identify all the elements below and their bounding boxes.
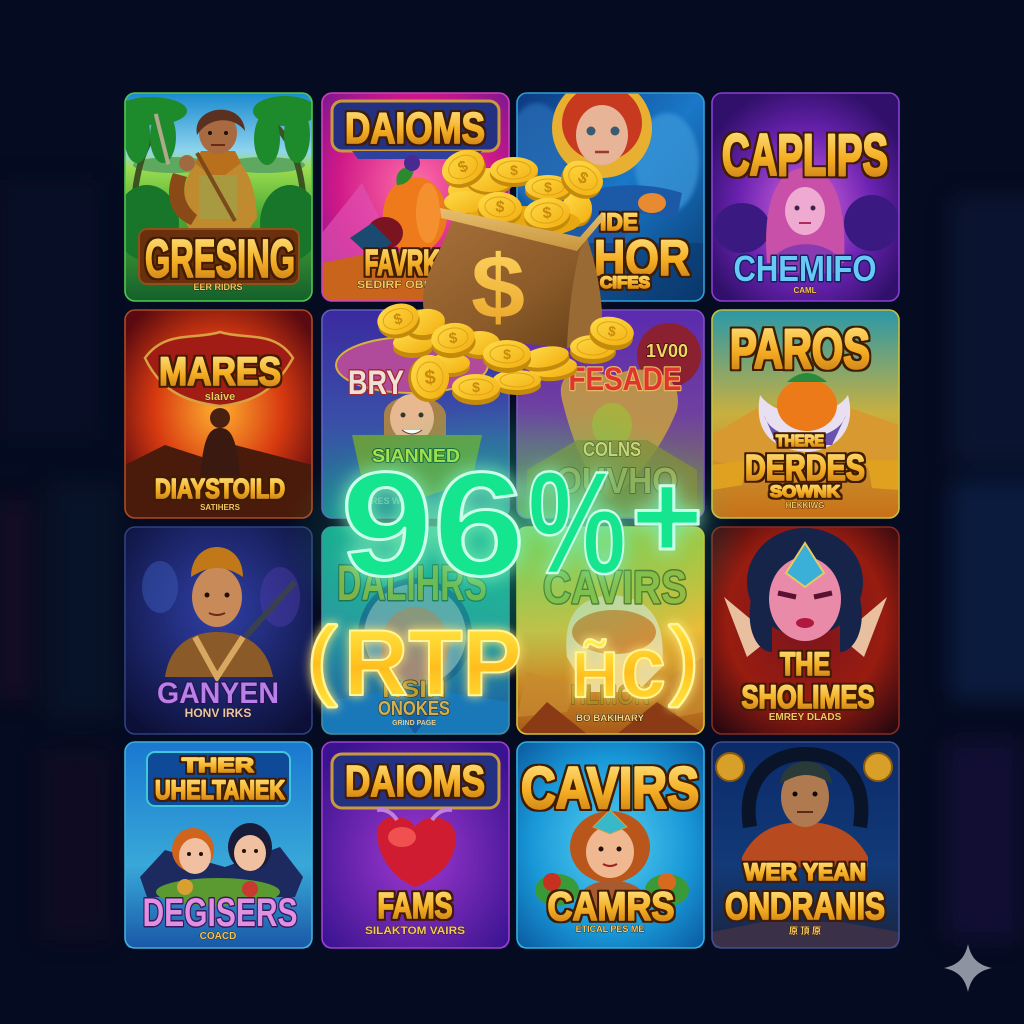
game name: ONOKES [378,698,450,720]
scene [517,527,704,734]
title: FESADE [568,361,682,397]
scene [115,93,320,301]
scene [125,742,312,948]
subheadline: (RTP Hc): RTP [344,610,522,715]
back coins: $ [544,179,552,195]
subtitle: ETICAL PES ME [576,924,644,934]
subtitle: CAML [793,286,817,295]
heading word: THE [780,646,830,682]
card 11: Cavirs yellow [517,527,704,734]
card 4: Caplips [712,93,900,301]
title: PAROS [730,317,870,380]
game word: HSIH [382,676,446,703]
subtitle: SATIHERS [200,503,241,512]
game name: FAVRK [364,242,440,283]
subtitle: SEDIRF OBI [357,279,427,291]
front coins: $ [607,322,617,340]
headline: 96%+ [341,442,703,607]
number badge: 1V00 [646,341,688,361]
card 16 border [712,742,899,948]
card 9 border [125,527,312,734]
icon: money bag with coins [374,143,636,405]
game name: OUVHO [556,460,678,501]
scene [322,527,509,734]
scene [712,527,899,734]
card 4 border [712,93,899,301]
card 3: Thor [518,94,704,300]
subtitle: GRIND PAGE [392,720,436,727]
card 9: Ganyen [125,527,312,734]
title: BRY [348,364,404,402]
title: UHELTANEK [155,775,285,805]
bag rim [440,208,603,251]
title: SHOLIMES [742,679,874,715]
front coins: $ [472,379,480,395]
game name: DIAYSTOILD [155,473,285,504]
back coins: $ [575,169,591,188]
title: MARES [159,350,281,394]
game name: FAMS [378,885,452,926]
heading word: THERE [776,433,824,450]
game name: SIANNED [372,446,460,466]
scene [125,310,312,518]
front coins: $ [424,366,437,389]
subheadline: (RTP Hc): ) [670,611,698,707]
scene [712,742,899,948]
card 13 border [125,742,312,948]
card 6 border [322,310,509,518]
subtitle: SILAKTOM VAIRS [365,925,465,937]
game name: DEGISERS [142,891,298,935]
title: ONDRANIS [725,886,885,928]
scene [518,94,704,300]
card 1 border [125,93,312,301]
icon: sparkle watermark [944,944,992,992]
game word: SOWNK [770,482,841,501]
card 10: Dalihrs [322,527,509,734]
subtitle: HEKKIWG [786,501,824,510]
headline: 96%+: 6 [433,442,525,607]
card 12 border [712,527,899,734]
card 7: Fesade [517,310,704,518]
title: DALIHRS [337,555,487,611]
card 1: Gresing [115,93,320,301]
game word: HLMON [570,679,650,710]
card 8 border [712,310,899,518]
title: DAIOMS [345,104,485,153]
heading word: THER [182,755,255,777]
headline: 96%+: % [528,442,626,605]
back coins [436,143,609,238]
subtitle: EMREY DLADS [769,712,842,723]
back coins: $ [495,199,505,216]
game word: COLNS [583,439,641,461]
card 15 border [517,742,704,948]
scene [712,310,899,518]
front coins: $ [392,310,405,329]
scene [125,527,312,734]
scene [712,93,900,301]
title: CAVIRS [521,756,699,821]
card 15: Cavirs cyan [517,742,704,948]
game name: CHEMIFO [734,248,876,289]
subtitle: EER RIDRS [193,282,243,292]
card 3 border [517,93,704,301]
subtitle: GIRRES WW [355,496,410,506]
card 5: Mares [125,310,312,518]
card 2 border [322,93,509,301]
heading word: IDE [600,209,638,236]
subtitle: CIFES [600,273,650,292]
card 7 border [517,310,704,518]
card 2: Daioms fruit [322,93,509,301]
front coins: $ [503,346,511,362]
title: HOR [594,230,690,286]
back coins: $ [510,162,518,178]
front coins: $ [448,329,459,347]
dollar sign: $ [471,236,525,337]
subheadline: (RTP Hc): H̃ [572,638,618,711]
back coins: $ [456,158,471,177]
game name: CAMRS [548,885,674,929]
card 14: Daioms heart [322,742,509,948]
subheadline: (RTP Hc): c [620,617,666,716]
title: GANYEN [157,677,279,710]
scene [322,310,509,518]
heading word: WER YEAN [744,859,866,886]
card 8: Paros [712,310,899,518]
green glow behind headline [285,400,745,680]
back coins: $ [542,205,552,222]
card 6: Bry [322,310,509,518]
card 10 border [322,527,509,734]
subheadline: (RTP Hc): ( [308,611,337,707]
title: GRESING [145,229,295,289]
scene [322,742,509,948]
card 11 border [517,527,704,734]
card 14 border [322,742,509,948]
bag side fold [567,238,602,348]
subheadline: (RTP Hc) [308,610,698,716]
card 16: Ondranis [712,742,899,948]
scene [322,93,509,301]
subtitle: BO BAKIHARY [576,713,644,723]
headline: 96%+: 9 [341,442,433,607]
title: CAVIRS [543,561,687,613]
headline: 96%+: + [631,448,703,586]
front coins [374,299,636,405]
card 5 border [125,310,312,518]
card 12: Sholimes [712,527,899,734]
title: DAIOMS [345,757,485,806]
subtitle: COACD [200,931,236,942]
subtitle: 原 頂 原 [789,926,821,936]
bag body [423,218,602,348]
game name: DERDES [745,447,865,488]
scene [517,742,704,948]
tagline: slaive [205,391,235,403]
subtitle: HONV IRKS [185,706,251,720]
card 13: Degisers [125,742,312,948]
title: CAPLIPS [722,123,888,188]
scene [517,310,704,518]
